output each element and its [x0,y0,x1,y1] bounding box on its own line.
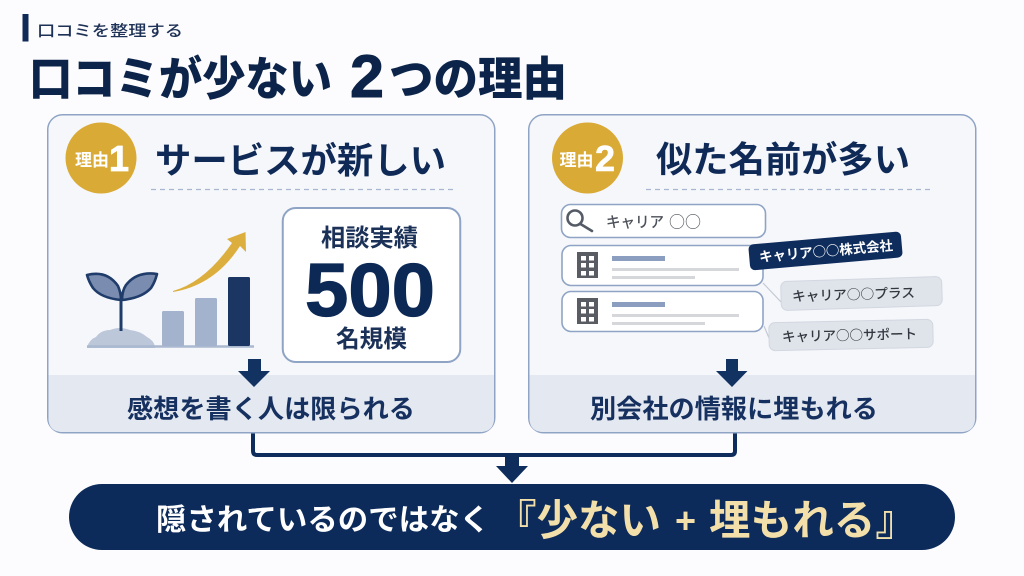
stat card [283,208,460,362]
panel: reason 2 [529,115,976,433]
title: 口コミが少ない [29,53,332,105]
arrow: down 1 [238,359,270,387]
arrow: down 2 [716,359,748,387]
tag: company name highlighted: キャリア○○株式会社 [758,234,894,266]
bar chart: growth [87,277,254,346]
badge: reason 2: 2 [595,138,615,179]
heading: reason 1: サービスが新しい [155,140,446,181]
conclusion lead text: 隠されているのではなく [156,504,490,537]
conclusion banner [69,484,955,550]
conclusion highlight [495,497,917,544]
result text 1: 感想を書く人は限られる [127,394,415,424]
search box: キャリア [606,214,664,231]
badge: reason 1: 1 [109,138,129,179]
result card 2 [562,292,763,332]
conclusion highlight: 埋もれる』 [709,497,917,544]
tag: company name plus: キャリア○○プラス [792,281,915,305]
badge: reason 1: 理由 [75,151,109,170]
title [29,43,567,110]
icon: building [577,252,598,278]
search box [562,204,766,238]
badge: reason 1 [66,122,136,194]
connector: panels to conclusion [253,433,735,483]
title: つの理由 [389,53,567,105]
badge: reason 2: 理由 [560,151,594,170]
conclusion highlight: + [675,500,696,541]
stat card: 相談実績 [321,225,418,252]
icon: search [568,210,592,231]
result band 1 [48,375,494,432]
stat card: 500 [305,248,435,332]
icon: seedling [87,273,157,348]
icon: building [577,298,598,324]
stat card: 名規模 [336,326,407,353]
result band 2 [530,375,975,432]
result card 1 [562,246,763,286]
section label [22,14,183,42]
conclusion highlight: 『少ない [495,497,661,544]
heading: reason 2: 似た名前が多い [656,139,910,180]
search box: ○○ [669,208,701,232]
tag: company name support: キャリア○○サポート [782,323,917,345]
result text 2: 別会社の情報に埋もれる [590,394,878,424]
tag: company name support [769,319,933,351]
badge: reason 2 [552,122,623,194]
panel: reason 1 [48,115,495,433]
leader lines [763,283,782,338]
title: 2 [350,43,384,110]
tag: company name plus [781,276,942,311]
arrow: growth [173,232,246,292]
section label: 口コミを整理する [37,22,183,40]
